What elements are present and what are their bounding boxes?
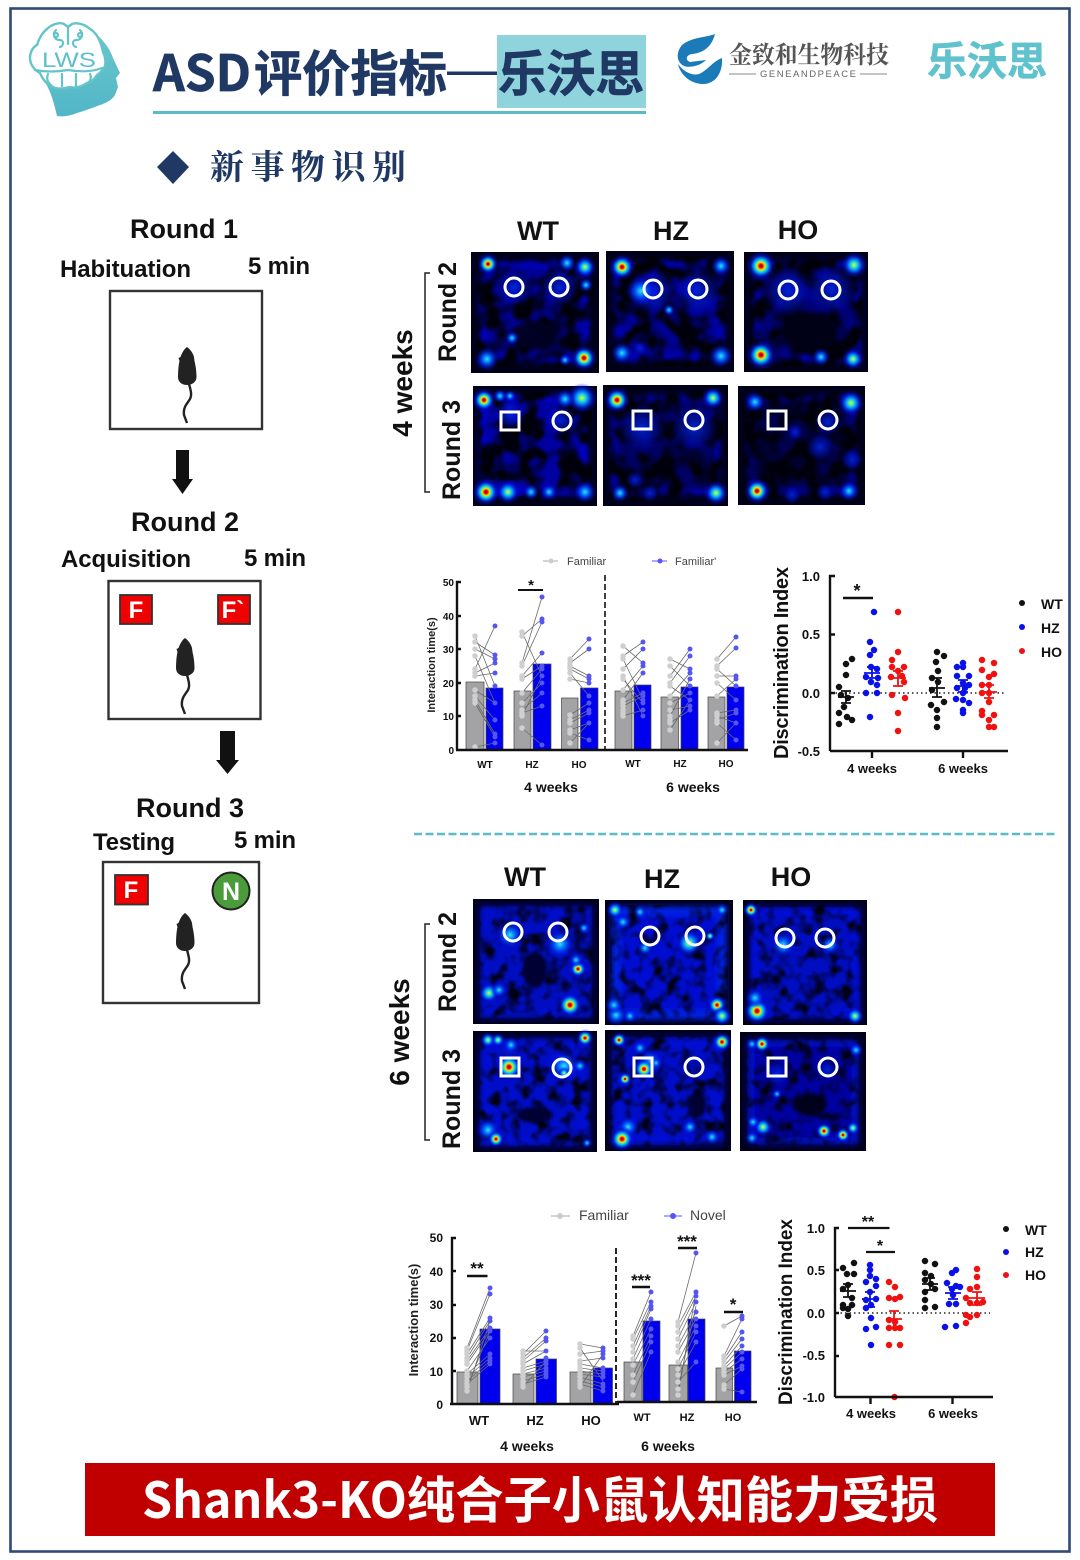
section heading text: 新事物识别: [210, 140, 406, 189]
x tick labels: WT: [477, 760, 493, 771]
side labels: [387, 262, 466, 500]
y tick labels: 0: [448, 746, 454, 757]
axes: [830, 576, 1008, 758]
icon: diamond: [157, 151, 189, 184]
y tick labels: [430, 1231, 443, 1412]
blue points: [490, 1253, 742, 1392]
HO points: [889, 1269, 983, 1397]
bar chart: interaction time 4 weeks test: [426, 556, 748, 795]
object F prime: [218, 595, 250, 624]
y tick labels: 10: [443, 712, 454, 723]
arrow: [172, 450, 193, 494]
significance: [848, 1214, 895, 1255]
y tick labels: [443, 578, 454, 757]
x tick labels: [846, 1406, 978, 1421]
x tick labels: HZ: [525, 760, 539, 771]
divider line: [414, 833, 1055, 835]
y tick labels: [798, 569, 820, 759]
y tick labels: 0.0: [807, 1306, 825, 1321]
significance: *: [730, 1295, 737, 1314]
heatmap: HO round 2: [744, 251, 868, 372]
side labels: Round 2: [434, 262, 462, 362]
heatmap: WT round 3: [473, 1029, 597, 1152]
axis title: Discrimination Index: [771, 567, 793, 759]
title text: 乐沃思: [498, 35, 644, 106]
section heading: [157, 140, 406, 189]
heatmap: HO round 3: [740, 1032, 866, 1151]
legend: [543, 556, 716, 568]
y tick labels: 30: [430, 1298, 443, 1312]
bar chart: interaction time 6 weeks test: WT: [633, 1412, 651, 1424]
significance: **: [862, 1214, 875, 1231]
blue points: [495, 597, 736, 745]
significance: **: [470, 1259, 484, 1278]
axes: [450, 1238, 757, 1404]
x tick labels: HZ: [673, 759, 687, 770]
arena box: [103, 862, 259, 1003]
side labels: Round 3: [438, 1049, 466, 1149]
panel: protocol Round 1: [60, 214, 310, 429]
side labels: 6 weeks: [384, 978, 415, 1086]
y tick labels: 0.5: [807, 1263, 825, 1278]
x tick labels: 4 weeks: [847, 761, 897, 776]
y tick labels: 20: [430, 1331, 443, 1345]
y tick labels: 40: [443, 612, 454, 623]
significance: [467, 1232, 743, 1314]
mean and error bars: [840, 1278, 985, 1328]
group labels: 6 weeks: [641, 1438, 695, 1454]
legend: [1003, 1222, 1047, 1283]
x tick labels: HO: [718, 759, 734, 770]
title highlight: [497, 35, 646, 108]
x tick labels: WT: [469, 1413, 489, 1428]
brand name: 乐沃思: [927, 29, 1047, 87]
gray points: [475, 632, 717, 747]
axis title: Interaction time(s): [426, 617, 438, 713]
group labels: [500, 1438, 695, 1454]
y tick labels: 20: [443, 679, 454, 690]
y tick labels: 40: [430, 1265, 443, 1279]
legend: HO: [1025, 1267, 1046, 1283]
logo: head with brain: [30, 23, 120, 116]
column headers: WT: [504, 862, 546, 892]
zero line: [836, 1312, 990, 1314]
x tick labels: [469, 1413, 601, 1428]
conclusion banner: Shank3-KO纯合子小鼠认知能力受损: [142, 1461, 938, 1533]
panel: protocol Round 2: 5 min: [244, 545, 306, 572]
object F: [115, 875, 148, 904]
bar chart: interaction time 6 weeks test: HO: [725, 1412, 742, 1424]
column headers: HZ: [653, 216, 689, 246]
significance: *: [853, 581, 861, 601]
object F: F: [129, 597, 143, 624]
x tick labels: HZ: [526, 1413, 544, 1428]
heatmap: WT round 2: [471, 252, 599, 373]
legend: Familiar: [579, 1207, 629, 1223]
x tick labels: [847, 761, 988, 776]
legend: HZ: [1025, 1244, 1044, 1260]
column headers: HO: [778, 215, 818, 245]
panel: protocol Round 3: 5 min: [234, 827, 296, 854]
column headers: HO: [771, 862, 811, 892]
x tick labels: [477, 759, 734, 771]
heatmap: HZ round 2: [606, 251, 734, 372]
icon: mouse: [176, 638, 194, 714]
significance: ***: [677, 1232, 697, 1251]
legend: WT: [1025, 1222, 1047, 1238]
logo: Gene and Peace: GENEANDPEACE: [760, 69, 856, 80]
legend: Familiar': [675, 556, 716, 568]
panel: protocol Round 2: Acquisition: [61, 546, 191, 573]
scatter chart: discrimination index 4 weeks test: [771, 567, 1063, 776]
bars: [466, 664, 744, 750]
HO points: [891, 612, 994, 731]
legend: [1019, 596, 1063, 660]
y tick labels: 0.0: [802, 686, 820, 701]
significance: *: [528, 577, 534, 594]
object N: N: [222, 878, 240, 906]
WT points: [839, 652, 944, 727]
title text: ASD: [152, 34, 251, 106]
y tick labels: -0.5: [803, 1348, 825, 1363]
axes: [835, 1228, 993, 1404]
panel: protocol Round 3: [93, 793, 296, 1003]
column headers: HZ: [644, 864, 680, 894]
x tick labels: HO: [572, 760, 587, 771]
arrow: [216, 731, 239, 774]
x tick labels: 6 weeks: [938, 761, 988, 776]
group labels: 4 weeks: [524, 779, 578, 795]
group labels: 4 weeks: [500, 1438, 554, 1454]
icon: mouse: [176, 913, 194, 989]
scatter chart: discrimination index 6 weeks test: [776, 1214, 1047, 1421]
bar chart: interaction time 6 weeks test: [406, 1207, 757, 1454]
axis title: Interaction time(s): [406, 1264, 421, 1376]
y tick labels: [803, 1221, 825, 1405]
significance: [843, 581, 873, 601]
title text: 评价指标: [254, 35, 447, 106]
logo: head with brain: LWS: [42, 49, 96, 72]
object F: F: [124, 877, 138, 904]
object N: [212, 872, 250, 910]
panel: protocol Round 3: Testing: [93, 829, 175, 856]
heatmap: WT round 2: [473, 899, 599, 1024]
title: [152, 34, 646, 114]
WT points: [843, 1261, 935, 1316]
panel: protocol Round 2: [61, 507, 306, 719]
bars: [457, 1319, 751, 1404]
y tick labels: 1.0: [807, 1221, 825, 1236]
logo: Gene and Peace: 金致和生物科技: [729, 35, 889, 70]
heatmap: HO round 3: [738, 386, 865, 505]
x tick labels: HO: [581, 1413, 601, 1428]
arena box: [110, 291, 262, 429]
legend: Novel: [690, 1207, 726, 1223]
heatmap: HZ round 2: [605, 900, 733, 1026]
logo: Gene and Peace: [678, 34, 889, 84]
significance: ***: [631, 1271, 651, 1290]
significance: *: [877, 1238, 884, 1255]
paired lines: [467, 1253, 742, 1395]
bar chart: interaction time 6 weeks test: HZ: [680, 1412, 695, 1424]
panel: protocol Round 2: Round 2: [131, 507, 239, 537]
group labels: [524, 779, 720, 795]
y tick labels: 0: [436, 1398, 443, 1412]
heatmap: HZ round 3: [603, 385, 728, 506]
title underline: [153, 111, 646, 114]
divider: [604, 575, 606, 750]
legend: [551, 1207, 726, 1223]
zero line: [831, 692, 1004, 694]
y tick labels: 50: [443, 578, 454, 589]
HZ points: [866, 612, 969, 717]
side labels: [384, 912, 466, 1149]
gray points: [467, 1322, 724, 1395]
panel: protocol Round 3: Round 3: [136, 793, 244, 823]
y tick labels: 1.0: [802, 569, 820, 584]
paired lines: [475, 597, 736, 747]
icon: mouse: [178, 347, 196, 423]
heatmap: HO round 2: [743, 900, 867, 1025]
legend: HZ: [1041, 620, 1060, 636]
side labels: Round 2: [434, 912, 462, 1012]
axis title: Discrimination Index: [776, 1219, 797, 1405]
y tick labels: -0.5: [798, 744, 820, 759]
group labels: 6 weeks: [666, 779, 720, 795]
panel: protocol Round 1: Habituation: [60, 256, 191, 283]
panel: protocol Round 1: 5 min: [248, 253, 310, 280]
x tick labels: WT: [625, 759, 641, 770]
column headers: [517, 215, 818, 246]
panel: protocol Round 1: Round 1: [130, 214, 238, 244]
x tick labels: 4 weeks: [846, 1406, 896, 1421]
HZ points: [866, 1265, 960, 1345]
y tick labels: 30: [443, 645, 454, 656]
y tick labels: 10: [430, 1365, 443, 1379]
x tick labels: 6 weeks: [928, 1406, 978, 1421]
legend: HO: [1041, 644, 1062, 660]
mean and error bars: [838, 667, 997, 703]
side labels: 4 weeks: [387, 329, 418, 437]
heatmap: WT round 3: [472, 383, 597, 506]
axes: [456, 582, 748, 750]
heatmap: HZ round 3: [605, 1030, 732, 1152]
y tick labels: 50: [430, 1231, 443, 1245]
object F: [120, 595, 152, 624]
column headers: [504, 862, 811, 894]
title text: [152, 34, 644, 106]
divider: [615, 1248, 617, 1404]
legend: WT: [1041, 596, 1063, 612]
panel: 6 weeks heatmaps: [384, 862, 867, 1152]
arena box: [108, 581, 260, 719]
object F prime: F`: [222, 597, 244, 624]
y tick labels: 0.5: [802, 627, 820, 642]
panel: 4 weeks heatmaps: [387, 215, 868, 506]
side labels: Round 3: [438, 400, 466, 500]
legend: Familiar: [567, 556, 606, 568]
significance: [518, 577, 543, 594]
column headers: WT: [517, 216, 559, 246]
y tick labels: -1.0: [803, 1390, 825, 1405]
